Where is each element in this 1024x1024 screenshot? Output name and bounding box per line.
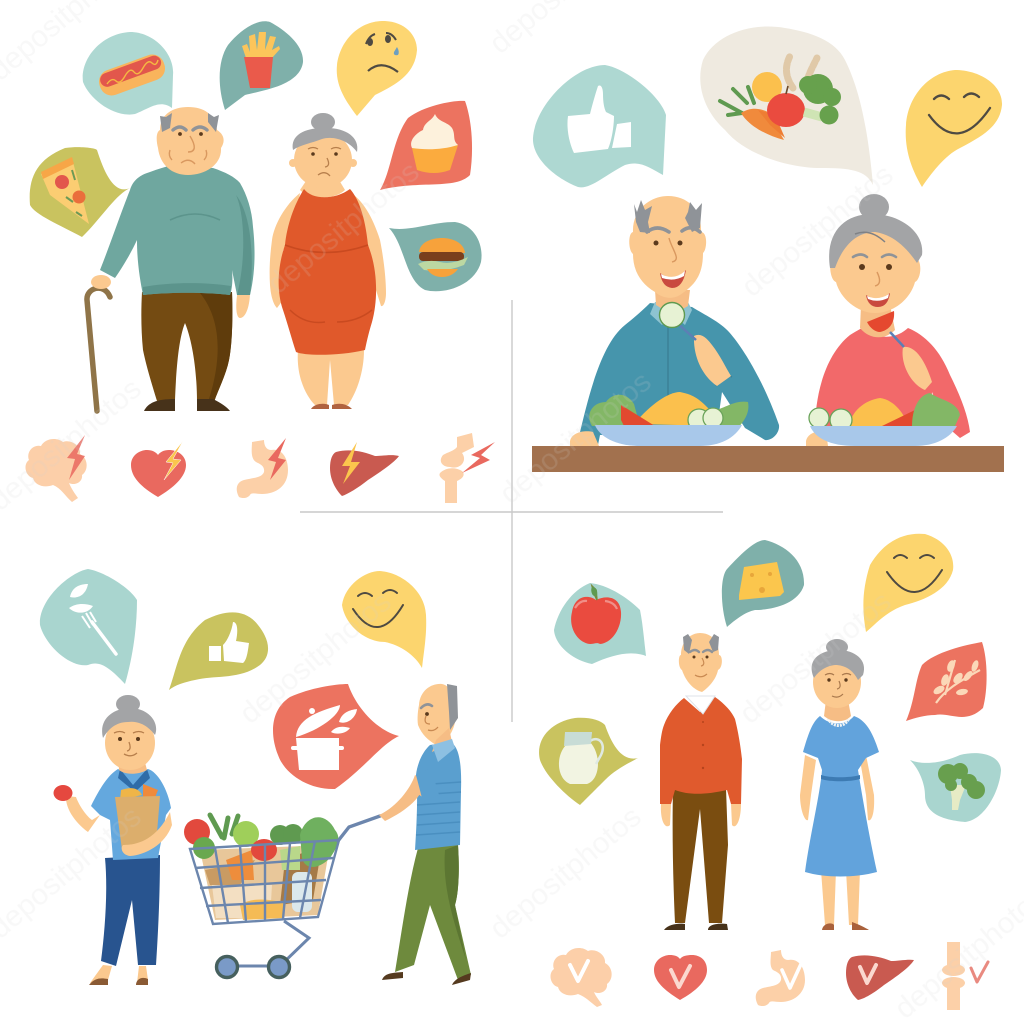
bubble: sad face — [337, 21, 417, 116]
shirt — [580, 303, 779, 445]
neck — [860, 305, 895, 337]
pearl necklace — [828, 718, 849, 726]
head — [294, 132, 352, 188]
belt — [821, 775, 860, 781]
watermark text: depositphotos — [493, 365, 658, 510]
forearm and hand with fork — [694, 335, 731, 386]
character: healthy woman — [800, 639, 879, 930]
character: man eating — [570, 196, 779, 446]
icon: healthy heart — [654, 955, 707, 1000]
character: man pushing cart — [379, 684, 471, 985]
bubble: burger — [389, 222, 482, 291]
basket wire frame — [190, 840, 339, 924]
watermark text: depositphotos — [733, 585, 898, 730]
wheels — [216, 956, 238, 978]
cart contents — [200, 845, 330, 920]
grey hair and bun — [311, 113, 335, 131]
shoes — [311, 404, 352, 409]
food on plate — [589, 395, 640, 426]
plate — [595, 425, 742, 446]
shopping cart — [184, 815, 380, 978]
cucumber on fork — [660, 302, 684, 328]
watermark text: depositphotos — [735, 158, 900, 303]
collar — [686, 696, 715, 714]
bubble: smiling face — [863, 534, 953, 632]
legs — [298, 350, 364, 405]
collar — [650, 302, 692, 325]
head — [813, 656, 861, 708]
watermark text: depositphotos — [233, 585, 398, 730]
trousers — [673, 788, 728, 923]
bubble: hot dog — [83, 32, 173, 115]
feet — [90, 965, 148, 983]
shoes — [822, 922, 869, 930]
neck — [655, 290, 690, 315]
arm — [379, 775, 433, 821]
shoes — [144, 399, 230, 411]
bubble: smiling face — [906, 70, 1002, 187]
neck — [824, 700, 851, 721]
neck and collar — [432, 728, 452, 752]
right hand — [236, 290, 250, 318]
icon: joint with lightning — [439, 433, 495, 503]
icon: liver with lightning — [330, 442, 399, 496]
bubble: smiling face — [342, 571, 426, 668]
panel: eating healthy food at table — [532, 27, 1004, 472]
bubble: cooking pot — [273, 684, 399, 789]
bubble: wheat — [906, 642, 987, 721]
shirt — [91, 769, 171, 860]
handle — [338, 816, 380, 841]
trousers — [101, 855, 160, 966]
trousers — [141, 292, 232, 402]
table — [532, 446, 1004, 472]
hands — [661, 804, 741, 826]
trousers — [395, 845, 471, 980]
icon: stomach with lightning — [237, 438, 288, 498]
plate — [810, 426, 957, 446]
left hand — [570, 431, 599, 446]
bubble: fries — [220, 21, 303, 110]
icon: healthy stomach — [756, 950, 805, 1006]
sweater — [660, 697, 742, 804]
neck — [300, 175, 345, 198]
dress — [803, 716, 879, 876]
watermark text: depositphotos — [261, 155, 426, 300]
character: overweight man with cane — [87, 107, 255, 411]
left hand — [806, 431, 828, 446]
left hand on cane — [91, 275, 111, 289]
panel: unhealthy diet — [26, 21, 495, 503]
shoes — [382, 972, 471, 985]
bubble: cupcake — [380, 101, 472, 190]
character: woman with shopping bag — [54, 695, 172, 985]
cane — [87, 288, 110, 411]
icon: healthy liver — [846, 955, 914, 1000]
panel: healthy outcome — [539, 534, 1001, 1010]
head — [830, 222, 920, 313]
quadrant divider lines — [300, 300, 723, 722]
bubble: pizza — [30, 147, 130, 237]
icon: healthy joint — [942, 942, 988, 1010]
shirt — [415, 742, 461, 850]
legs — [821, 870, 860, 925]
bubble: milk jug — [539, 718, 638, 805]
character: woman eating — [806, 194, 970, 446]
panel: shopping for healthy groceries — [40, 569, 471, 985]
hair and bun — [826, 639, 848, 655]
bubble: apple — [554, 583, 646, 664]
watermark text: depositphotos — [483, 800, 648, 945]
icon: brain with lightning — [26, 435, 87, 502]
character: overweight woman — [270, 113, 386, 409]
bubble: fork with leaves — [40, 569, 137, 684]
hair and bun — [116, 695, 140, 713]
bubble: thumbs up — [169, 612, 268, 690]
arms — [800, 755, 874, 820]
icon: healthy brain — [551, 948, 612, 1007]
sweater — [100, 165, 255, 295]
head — [679, 633, 722, 692]
head — [629, 196, 706, 298]
hair and bun — [859, 194, 889, 220]
dress — [279, 189, 376, 355]
top — [815, 326, 970, 445]
undercarriage — [228, 921, 309, 966]
grocery bag — [143, 784, 158, 800]
bubble: thumbs up — [533, 65, 666, 187]
food on plate — [850, 398, 908, 426]
apple — [54, 785, 72, 801]
character: healthy man — [660, 633, 742, 930]
neck and head — [118, 755, 147, 774]
bubble: cheese — [722, 540, 804, 627]
arms — [270, 192, 386, 308]
bubble: broccoli — [910, 753, 1001, 822]
bubble: fruit and vegetables — [700, 27, 873, 185]
head — [157, 107, 224, 175]
head — [418, 684, 456, 745]
tomato on fork — [867, 311, 894, 332]
icon: heart with lightning — [131, 441, 186, 497]
hand and fork — [903, 347, 932, 390]
arm with apple — [66, 796, 100, 832]
shoes — [664, 924, 728, 930]
hand and arm under bag — [122, 812, 172, 856]
